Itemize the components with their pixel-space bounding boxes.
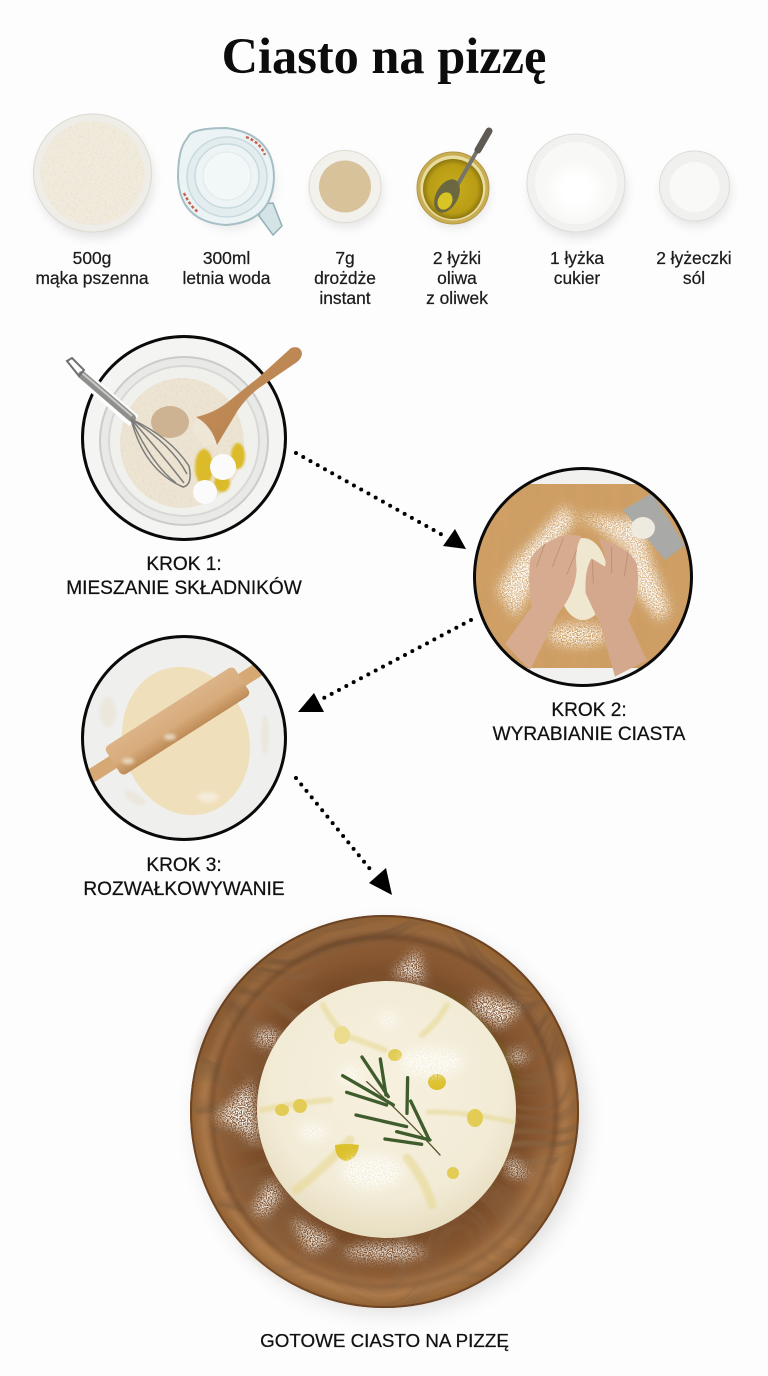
step 3 label: KROK 3: bbox=[146, 855, 222, 876]
label: oil: z oliwek bbox=[426, 288, 488, 308]
label: water: letnia woda bbox=[183, 268, 271, 288]
ingredient: yeast bbox=[309, 150, 381, 308]
step 1 label: MIESZANIE SKŁADNIKÓW bbox=[66, 577, 302, 599]
label: sugar: cukier bbox=[554, 268, 600, 288]
spoon flour bbox=[192, 418, 216, 446]
label: oil: 2 łyżki bbox=[433, 248, 481, 268]
arrow: step 3 to final bbox=[296, 778, 392, 895]
icon: wooden spoon bbox=[196, 347, 302, 445]
title: Ciasto na pizzę bbox=[222, 28, 546, 84]
dough ball bbox=[257, 981, 516, 1238]
icon: bench scraper bbox=[623, 493, 685, 560]
step 1 frame bbox=[82, 336, 286, 540]
dough bbox=[564, 538, 606, 620]
oil pool behind dough bbox=[280, 990, 520, 1220]
step 2 label: KROK 2: bbox=[551, 700, 627, 721]
label: yeast: instant bbox=[319, 288, 371, 308]
oil drizzle bbox=[262, 1005, 513, 1205]
ingredient: sugar bbox=[527, 134, 625, 288]
label: sugar: 1 łyżka bbox=[550, 248, 604, 268]
icon: oil spoon bbox=[429, 131, 489, 217]
step 2 label: WYRABIANIE CIASTA bbox=[493, 724, 686, 745]
icon: whisk bbox=[67, 358, 190, 487]
flour traces bbox=[100, 697, 269, 808]
icon: hands bbox=[505, 535, 647, 677]
label: yeast: 7g bbox=[335, 248, 355, 268]
step 3 frame bbox=[82, 636, 286, 840]
illustration: rolling dough bbox=[79, 635, 290, 845]
oil drops bbox=[275, 1026, 483, 1179]
ingredient: water in measuring cup bbox=[178, 128, 282, 288]
arrow: step 1 to step 2 bbox=[296, 453, 466, 549]
step 1: mixing bbox=[66, 335, 302, 599]
flour on pin bbox=[122, 734, 218, 802]
label: oil: oliwa bbox=[437, 268, 477, 288]
step 2 frame bbox=[474, 468, 692, 686]
step 1 label: KROK 1: bbox=[146, 554, 222, 575]
step 3 label: ROZWAŁKOWYWANIE bbox=[83, 879, 285, 900]
label: salt: sól bbox=[683, 268, 705, 288]
flour on dough bbox=[299, 1012, 464, 1189]
label: flour: 500g bbox=[73, 248, 111, 268]
wooden bowl bbox=[190, 915, 583, 1312]
arrow: step 2 to step 3 bbox=[298, 620, 471, 712]
final dough in wooden bowl bbox=[190, 915, 583, 1351]
label: water: 300ml bbox=[203, 248, 250, 268]
label: flour: mąka pszenna bbox=[35, 268, 149, 288]
ingredient: flour bbox=[34, 114, 152, 288]
label: salt: 2 łyżeczki bbox=[656, 248, 732, 268]
final label: GOTOWE CIASTO NA PIZZĘ bbox=[260, 1330, 509, 1351]
rosemary sprig bbox=[343, 1057, 440, 1155]
flour dusting on wood bbox=[215, 950, 532, 1259]
step 3: rolling bbox=[79, 635, 290, 900]
icon: rolling pin bbox=[89, 665, 262, 782]
flour scatter bbox=[497, 505, 670, 646]
illustration: mixing bowl bbox=[80, 335, 290, 545]
label: yeast: drożdże bbox=[314, 268, 376, 288]
ingredient: olive oil bbox=[417, 131, 489, 308]
ingredient: salt bbox=[656, 151, 732, 288]
illustration: kneading board bbox=[476, 470, 690, 684]
step 2: kneading bbox=[470, 465, 700, 745]
